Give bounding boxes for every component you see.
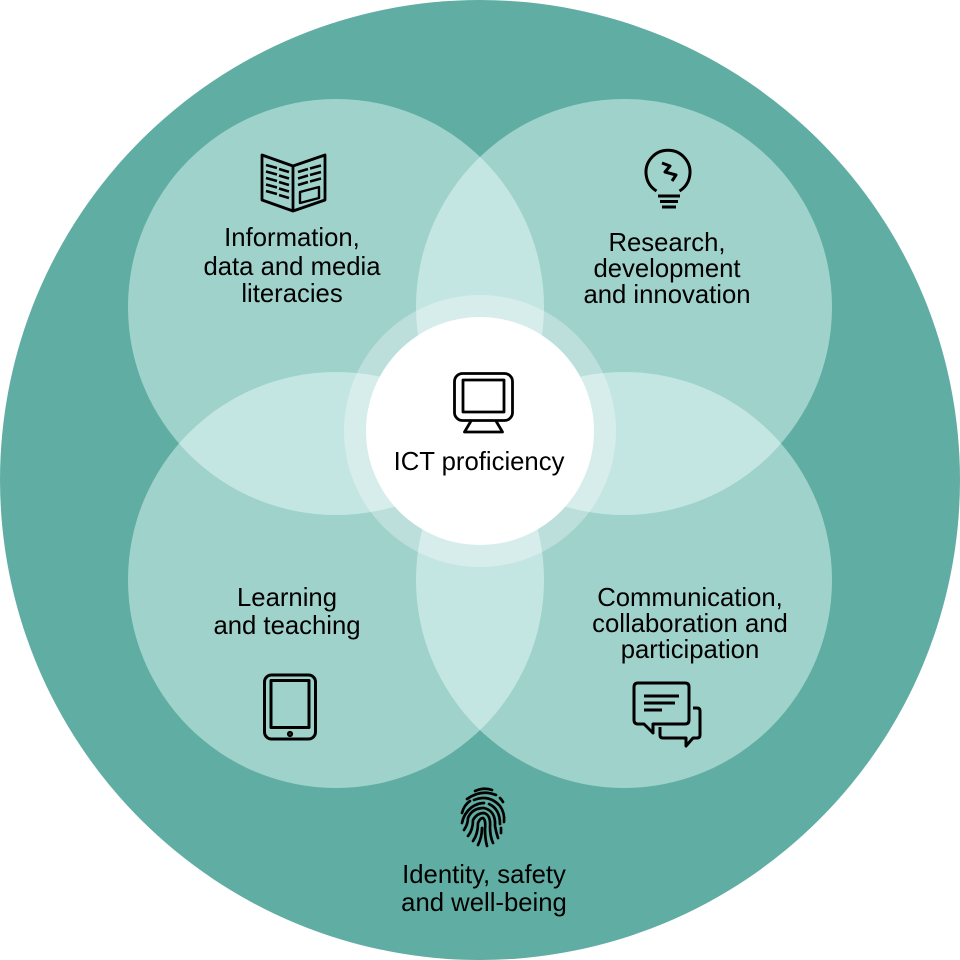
heading: communication, collaboration and participation: participation — [621, 636, 759, 664]
heading: ICT proficiency: ICT proficiency — [394, 448, 565, 476]
heading: identity, safety and well-being: Identity, safety — [402, 861, 566, 889]
icon: fingerprint — [462, 789, 504, 846]
petal circle: information, data and media literacies — [128, 99, 544, 515]
icon: light bulb — [646, 150, 690, 207]
heading: learning and teaching: Learning — [237, 584, 337, 612]
icon: speech bubbles — [634, 683, 700, 746]
heading: information, data and media literacies: data and media — [203, 253, 381, 281]
heading: information, data and media literacies: Information, — [224, 224, 360, 252]
heading: communication, collaboration and participation: Communication, — [597, 584, 783, 612]
icon: computer monitor — [454, 374, 512, 432]
centre halo ring — [344, 295, 616, 567]
heading: identity, safety and well-being: and well-being — [401, 889, 567, 917]
heading: learning and teaching: and teaching — [213, 612, 361, 640]
heading: information, data and media literacies: literacies — [241, 280, 343, 308]
icon: tablet — [264, 675, 316, 739]
petal circle: research, development and innovation — [416, 99, 832, 515]
petal circle: communication, collaboration and participation — [416, 372, 832, 788]
heading: research, development and innovation: development — [593, 255, 741, 283]
heading: communication, collaboration and participation: collaboration and — [592, 610, 788, 638]
icon: newspaper — [262, 155, 325, 211]
heading: research, development and innovation: Research, — [608, 229, 726, 257]
centre white circle — [366, 317, 594, 545]
heading: research, development and innovation: and innovation — [583, 281, 751, 309]
petal circle: learning and teaching — [128, 372, 544, 788]
